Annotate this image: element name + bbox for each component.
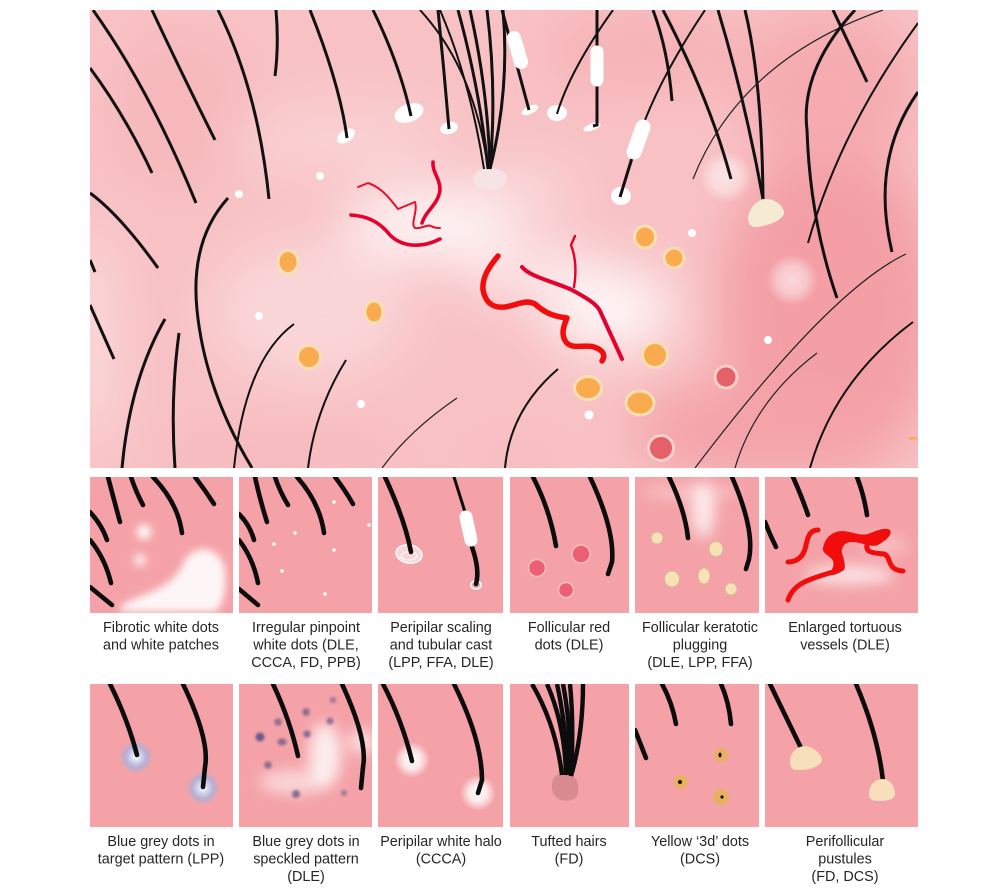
tuft of hairs (420, 10, 505, 169)
pustule (748, 199, 784, 227)
label: Peripilar scaling (390, 620, 492, 636)
follicular red dots (648, 366, 737, 460)
label: Blue grey dots in (252, 834, 360, 850)
panel: peripilar white halo (378, 684, 503, 868)
label: speckled pattern (253, 852, 359, 868)
peripilar scales (334, 99, 631, 205)
label: (FD, DCS) (811, 869, 879, 885)
label: Perifollicular (806, 834, 884, 850)
black hairs (90, 10, 918, 468)
panel: perifollicular pustules (765, 684, 918, 885)
peripilar white halo (700, 151, 752, 203)
label: plugging (673, 638, 727, 654)
tubular casts (514, 38, 643, 152)
label: (DLE) (287, 869, 325, 885)
tortuous vessels lower (483, 236, 622, 361)
panel: follicular red dots (510, 477, 629, 654)
white pinpoint dots (235, 172, 772, 420)
label: Yellow ‘3d’ dots (651, 834, 749, 850)
panel: follicular keratotic plugging (635, 477, 759, 671)
label: Follicular red (528, 620, 610, 636)
label: Enlarged tortuous (788, 620, 902, 636)
label: (DLE, LPP, FFA) (647, 655, 753, 671)
label: Peripilar white halo (380, 834, 502, 850)
tuft base (473, 168, 507, 190)
label: white dots (DLE, (252, 638, 359, 654)
panel: blue grey dots speckled pattern (239, 684, 376, 885)
panel: peripilar scaling and tubular cast (378, 477, 503, 671)
label: Fibrotic white dots (103, 620, 219, 636)
panel: main trichoscopy illustration (90, 10, 918, 468)
label: (LPP, FFA, DLE) (388, 655, 494, 671)
label: Irregular pinpoint (252, 620, 360, 636)
label: target pattern (LPP) (98, 852, 224, 868)
label: (FD) (555, 852, 583, 868)
panel: irregular pinpoint white dots (239, 477, 372, 671)
label: CCCA, FD, PPB) (251, 655, 361, 671)
tortuous vessels upper (351, 162, 440, 245)
label: (CCCA) (416, 852, 466, 868)
label: pustules (818, 852, 872, 868)
label: Blue grey dots in (107, 834, 215, 850)
label: and tubular cast (390, 638, 492, 654)
panel: blue grey dots target pattern (90, 684, 233, 868)
label: Follicular keratotic (642, 620, 758, 636)
panel: yellow 3d dots (635, 684, 759, 868)
orange fleck (909, 437, 917, 440)
yellow dots (278, 226, 684, 415)
label: (DCS) (680, 852, 720, 868)
label: vessels (DLE) (800, 638, 890, 654)
perifollicular halo (766, 254, 818, 306)
label: and white patches (103, 638, 219, 654)
label: Tufted hairs (531, 834, 607, 850)
panel: tufted hairs (510, 684, 629, 868)
panel: enlarged tortuous vessels (765, 477, 918, 654)
panel: fibrotic white dots (90, 477, 233, 654)
label: dots (DLE) (535, 638, 603, 654)
